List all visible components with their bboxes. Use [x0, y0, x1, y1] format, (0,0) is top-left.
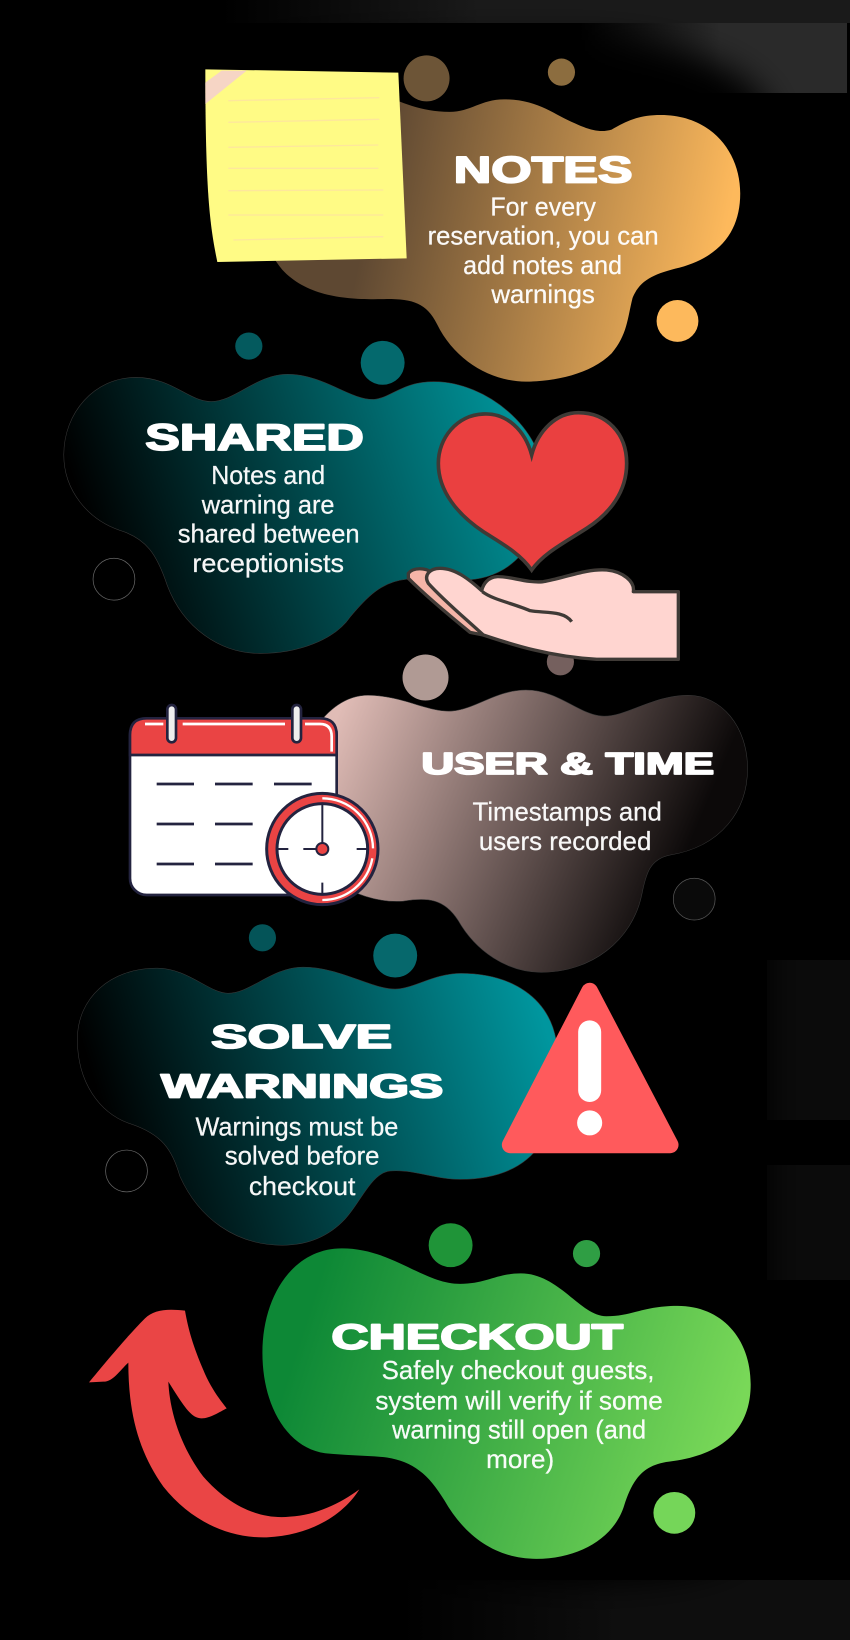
decorative circle	[404, 55, 450, 101]
text block: shared description: warning are	[201, 491, 335, 519]
text block: user and time description: Timestamps and	[473, 799, 662, 827]
text block: solve warnings description: checkout	[249, 1173, 355, 1201]
text block: notes description: reservation, you can	[428, 223, 659, 251]
text block: checkout description	[375, 1357, 663, 1474]
blob: shared background	[64, 374, 544, 653]
blob: solve warnings background	[77, 967, 559, 1245]
decorative circle	[548, 59, 575, 86]
panel: notes	[261, 55, 740, 382]
heading: solve warnings	[161, 1019, 443, 1105]
decorative circle	[249, 924, 276, 951]
heading: user and time: USER & TIME	[421, 748, 714, 781]
decorative circle	[93, 558, 135, 600]
text block: notes description	[428, 193, 659, 309]
text block: shared description: Notes and	[211, 462, 325, 490]
decorative circle	[106, 1150, 147, 1192]
text block: checkout description: Safely checkout guests,	[382, 1357, 654, 1385]
icon: calendar with clock	[130, 705, 378, 905]
text block: notes description: warnings	[490, 281, 595, 309]
text block: shared description: shared between	[178, 521, 360, 549]
icon: sticky note	[205, 69, 407, 262]
panel: checkout	[262, 1223, 751, 1559]
panel: shared	[64, 332, 544, 653]
heading: shared: SHARED	[145, 417, 364, 458]
heading: checkout: CHECKOUT	[331, 1317, 624, 1357]
blob: checkout background	[262, 1248, 751, 1559]
text block: solve warnings description	[196, 1113, 398, 1201]
arrow: curved red arrow	[89, 1310, 359, 1537]
panel: solve warnings	[77, 924, 670, 1245]
decorative circle	[429, 1223, 473, 1267]
text block: user and time description: users recorded	[479, 828, 651, 856]
decorative circle	[657, 300, 698, 342]
blob: notes background	[261, 88, 740, 382]
decorative circle	[573, 1240, 600, 1267]
text block: checkout description: system will verify if some	[375, 1387, 663, 1415]
decorative circle	[361, 341, 405, 385]
panel: user and time	[293, 648, 748, 972]
decorative circle	[673, 878, 715, 920]
icon: warning triangle	[510, 991, 670, 1145]
blob: user and time background	[293, 690, 748, 972]
heading: solve warnings: SOLVE	[211, 1019, 392, 1056]
heading: notes: NOTES	[454, 149, 633, 190]
icon: heart in hand	[408, 413, 678, 659]
decorative circle	[373, 934, 417, 978]
heading: solve warnings: WARNINGS	[161, 1068, 443, 1105]
decorative circle	[403, 654, 449, 700]
text block: solve warnings description: solved before	[225, 1143, 380, 1171]
text block: shared description	[178, 462, 360, 578]
text block: solve warnings description: Warnings must be	[196, 1113, 398, 1141]
decorative circle	[235, 332, 262, 360]
text block: notes description: add notes and	[463, 252, 622, 280]
text block: checkout description: warning still open (and	[391, 1417, 646, 1445]
text block: shared description: receptionists	[192, 550, 344, 578]
text block: checkout description: more)	[486, 1446, 554, 1474]
heart	[438, 413, 627, 570]
decorative circle	[653, 1492, 695, 1534]
text block: notes description: For every	[490, 193, 596, 221]
hand	[408, 568, 678, 659]
decorative circle	[547, 648, 574, 675]
text block: user and time description	[473, 799, 662, 856]
